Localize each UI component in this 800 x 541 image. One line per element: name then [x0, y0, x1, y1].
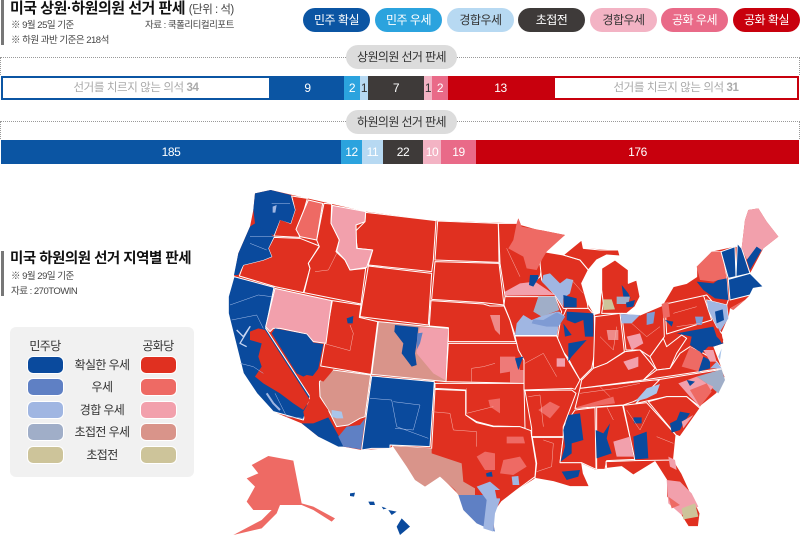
legend table: 민주당 [29, 339, 61, 353]
legend pills: 경합우세 [602, 13, 645, 27]
house bar: 19 [452, 145, 465, 159]
header accent bar [1, 0, 4, 45]
legend pills [303, 8, 800, 32]
house bar: 11 [367, 145, 378, 159]
legend pills: 공화 우세 [672, 13, 717, 27]
note: source: 자료 : 쿡폴리티컬리포트 [145, 20, 234, 31]
senate heading [346, 45, 457, 69]
panel: map legend [10, 327, 194, 477]
legend pills: 민주 확실 [314, 13, 359, 27]
title: 미국 상원·하원의원 선거 판세 (단위 : 석) [10, 0, 234, 17]
house heading [346, 110, 457, 134]
map accent bar [1, 251, 4, 296]
legend table: 공화당 [142, 339, 174, 353]
eastern states [498, 208, 778, 527]
house bar: 12 [345, 145, 358, 159]
note: date: ※ 9월 25일 기준 [11, 20, 74, 31]
senate bar: 2 [437, 81, 443, 95]
note: majority: ※ 하원 과반 기준은 218석 [11, 35, 109, 46]
house bar: 10 [426, 145, 438, 159]
house bar: 185 [162, 145, 180, 159]
house dotted frame [0, 121, 800, 139]
senate bar: 1 [425, 81, 431, 95]
senate bar [1, 76, 799, 100]
legend pills: 공화 확실 [744, 13, 789, 27]
legend table: 우세 [92, 380, 112, 394]
legend table [27, 339, 177, 464]
legend pills: 경합우세 [459, 13, 502, 27]
senate bar: 7 [393, 81, 399, 95]
senate dotted frame [0, 57, 800, 75]
western states [228, 190, 536, 532]
senate bar: 선거를 치르지 않는 의석 31 [614, 82, 738, 94]
map note: source: 자료 : 270TOWIN [11, 286, 77, 297]
Hawaii [350, 493, 410, 535]
contiguous US silhouette [228, 190, 778, 532]
map note: date: ※ 9월 29일 기준 [11, 271, 74, 282]
senate bar: 1 [361, 81, 367, 95]
legend table: 초접전 [86, 448, 118, 462]
legend table: 경합 우세 [80, 403, 124, 417]
legend table: 초접전 우세 [75, 425, 129, 439]
house bar: 22 [397, 145, 409, 159]
legend table: 확실한 우세 [75, 358, 129, 372]
house heading: 하원의원 선거 판세 [357, 115, 446, 129]
senate bar: 9 [304, 81, 311, 95]
house bar: 176 [628, 145, 647, 159]
senate bar: 2 [349, 81, 355, 95]
legend pills: 민주 우세 [386, 13, 431, 27]
legend pills: 초접전 [536, 13, 567, 27]
senate bar: 선거를 치르지 않는 의석 34 [74, 82, 198, 94]
senate heading: 상원의원 선거 판세 [357, 50, 446, 64]
senate bar: 13 [494, 81, 507, 95]
map title: 미국 하원의원 선거 지역별 판세 [10, 251, 191, 267]
house bar [1, 140, 799, 164]
Alaska [233, 456, 335, 535]
